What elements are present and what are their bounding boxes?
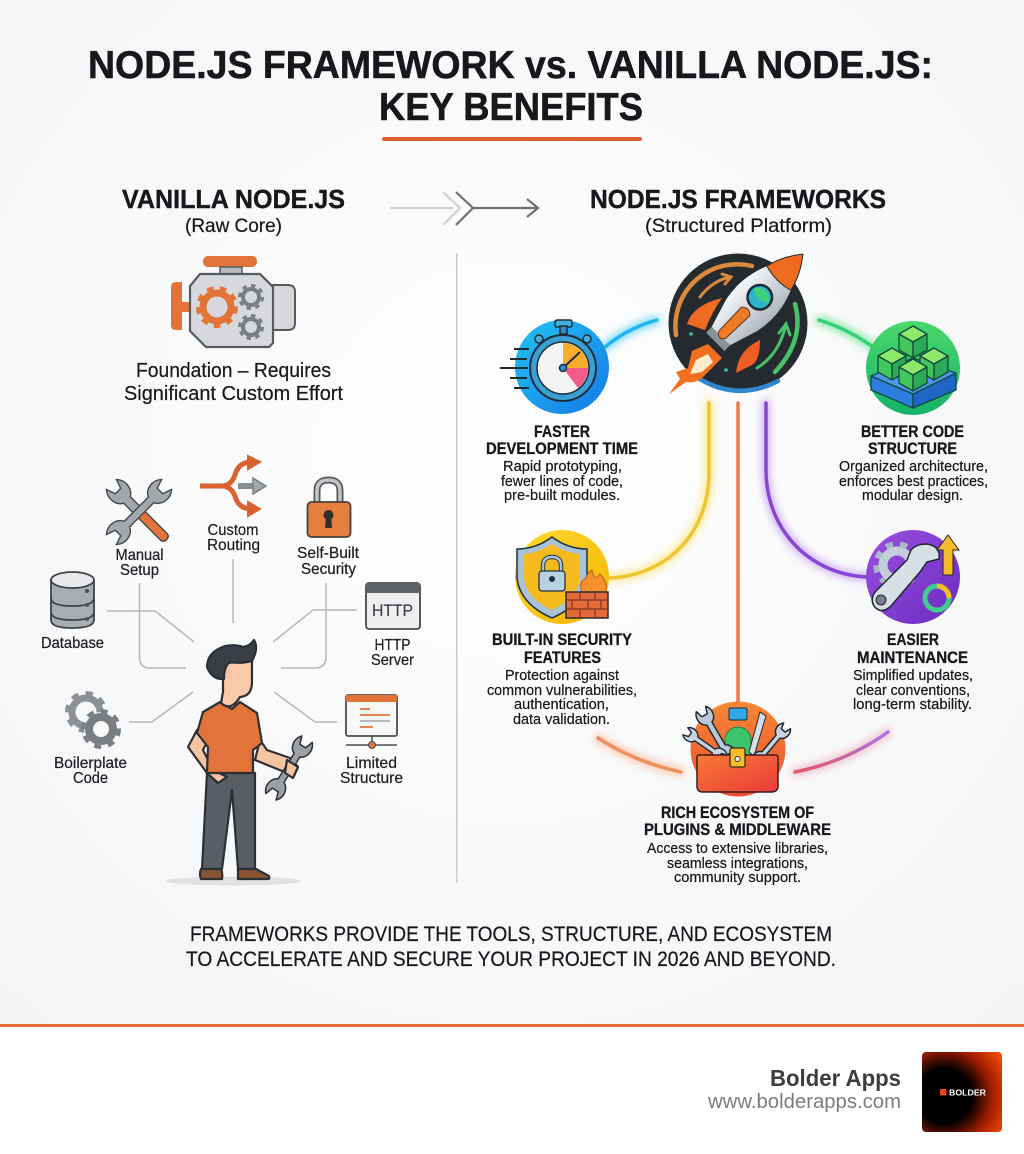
- icon: http window: [366, 583, 420, 629]
- label: http server: HTTP: [374, 637, 410, 654]
- heading: node.js frameworks: NODE.JS FRAMEWORKS: [590, 184, 886, 214]
- panel: vanilla node.js: [41, 256, 420, 886]
- text: faster development time: FASTER: [534, 423, 590, 441]
- text: rich ecosystem: community support.: [674, 870, 801, 886]
- icon: stopwatch: [500, 320, 609, 414]
- label: http server: Server: [371, 652, 415, 669]
- text: rich ecosystem: RICH ECOSYSTEM OF: [661, 804, 814, 822]
- text: easier maintenance: MAINTENANCE: [857, 649, 968, 667]
- text: easier maintenance: Simplified updates,: [853, 668, 973, 684]
- connector: lower left: [598, 738, 681, 772]
- brand name and url: www.bolderapps.com: [707, 1091, 901, 1113]
- connector: orange: [734, 403, 742, 705]
- icon: http window: HTTP: [372, 601, 413, 620]
- label: limited structure: [340, 755, 403, 787]
- text: foundation caption: Foundation – Requires: [136, 359, 331, 382]
- label: manual setup: Setup: [120, 562, 159, 579]
- icon: engine: [171, 256, 295, 347]
- heading: node.js frameworks: (Structured Platform): [645, 215, 832, 237]
- icon: boilerplate gears: [67, 693, 119, 747]
- brand name and url: Bolder Apps: [770, 1065, 901, 1091]
- text: easier maintenance: clear conventions,: [856, 683, 970, 699]
- text: built-in security features: FEATURES: [524, 649, 601, 667]
- icon: routing arrows: [200, 456, 266, 516]
- label: custom routing: [207, 522, 260, 554]
- text: built-in security features: [487, 631, 637, 728]
- text: easier maintenance: EASIER: [887, 631, 939, 649]
- text: foundation caption: Significant Custom Effort: [124, 382, 343, 405]
- text: better code structure: Organized architecture,: [839, 459, 988, 475]
- text: faster development time: DEVELOPMENT TIME: [486, 440, 638, 458]
- panel: node.js frameworks: [486, 237, 988, 886]
- brand name and url: [707, 1065, 901, 1113]
- icon: maintenance gear and wrench: [866, 530, 960, 624]
- heading: vanilla node.js: (Raw Core): [185, 215, 282, 237]
- footer: [0, 1024, 1024, 1154]
- text: rich ecosystem: [644, 804, 831, 886]
- logo: [922, 1052, 1002, 1132]
- text: rich ecosystem: Access to extensive libraries,: [647, 841, 828, 857]
- label: limited structure: Limited: [346, 755, 397, 772]
- text: better code structure: enforces best practices,: [839, 474, 988, 490]
- text: rich ecosystem: seamless integrations,: [667, 856, 808, 872]
- label: manual setup: [116, 547, 164, 579]
- heading: vanilla node.js: [122, 184, 345, 237]
- text: faster development time: [486, 423, 638, 504]
- panel divider: [456, 253, 458, 883]
- closing statement: TO ACCELERATE AND SECURE YOUR PROJECT IN 2026 AND BEYOND.: [186, 948, 836, 971]
- text: faster development time: pre-built modules.: [504, 488, 620, 504]
- text: better code structure: BETTER CODE: [861, 423, 964, 441]
- icon: rocket badge: [668, 237, 820, 394]
- label: custom routing: Routing: [207, 537, 260, 554]
- icon: limited structure: [346, 695, 397, 748]
- connector: yellow: [610, 403, 709, 578]
- figure: developer with wrench: [165, 640, 315, 886]
- connector: lower right: [795, 732, 888, 772]
- label: custom routing: Custom: [208, 522, 258, 539]
- connector: purple: [766, 403, 868, 577]
- icon: code cubes: [866, 321, 960, 415]
- title: NODE.JS FRAMEWORK vs. VANILLA NODE.JS:: [88, 44, 933, 87]
- arrow: vanilla to frameworks: [390, 192, 538, 225]
- label: self-built security: Security: [301, 561, 356, 578]
- heading: node.js frameworks: [590, 184, 886, 237]
- text: built-in security features: BUILT-IN SECURITY: [492, 631, 632, 649]
- text: easier maintenance: [853, 631, 973, 713]
- text: foundation caption: [124, 359, 343, 405]
- text: easier maintenance: long-term stability.: [853, 697, 972, 713]
- closing statement: FRAMEWORKS PROVIDE THE TOOLS, STRUCTURE, AND ECOSYSTEM: [190, 923, 832, 946]
- label: boilerplate code: Boilerplate: [54, 755, 127, 772]
- connector lines: [107, 559, 357, 722]
- icon: database: [51, 572, 94, 628]
- label: boilerplate code: Code: [73, 770, 108, 787]
- text: faster development time: fewer lines of code,: [501, 474, 623, 490]
- connector: green: [819, 320, 873, 347]
- text: built-in security features: Protection against: [505, 668, 619, 684]
- label: limited structure: Structure: [340, 770, 403, 787]
- text: built-in security features: data validation.: [513, 712, 610, 728]
- connector: blue: [605, 320, 657, 347]
- text: built-in security features: authentication,: [514, 697, 609, 713]
- text: faster development time: Rapid prototyping,: [503, 459, 622, 475]
- title: KEY BENEFITS: [379, 86, 643, 129]
- icon: crossed wrenches: [104, 477, 174, 547]
- label: self-built security: [297, 545, 360, 578]
- icon: padlock: [308, 480, 350, 537]
- text: rich ecosystem: PLUGINS & MIDDLEWARE: [644, 821, 831, 839]
- text: better code structure: STRUCTURE: [868, 440, 957, 458]
- heading: vanilla node.js: VANILLA NODE.JS: [122, 184, 345, 214]
- closing statement: [186, 923, 836, 971]
- label: http server: [371, 637, 415, 669]
- label: self-built security: Self-Built: [297, 545, 360, 562]
- icon: toolbox: [681, 702, 792, 796]
- label: database: Database: [41, 635, 104, 652]
- label: manual setup: Manual: [116, 547, 164, 564]
- label: boilerplate code: [54, 755, 127, 787]
- text: better code structure: [839, 423, 988, 504]
- text: built-in security features: common vulnerabilities,: [487, 683, 637, 699]
- title: [88, 44, 933, 141]
- text: better code structure: modular design.: [862, 488, 963, 504]
- logo: BOLDER: [949, 1088, 986, 1098]
- icon: security shield: [515, 530, 609, 624]
